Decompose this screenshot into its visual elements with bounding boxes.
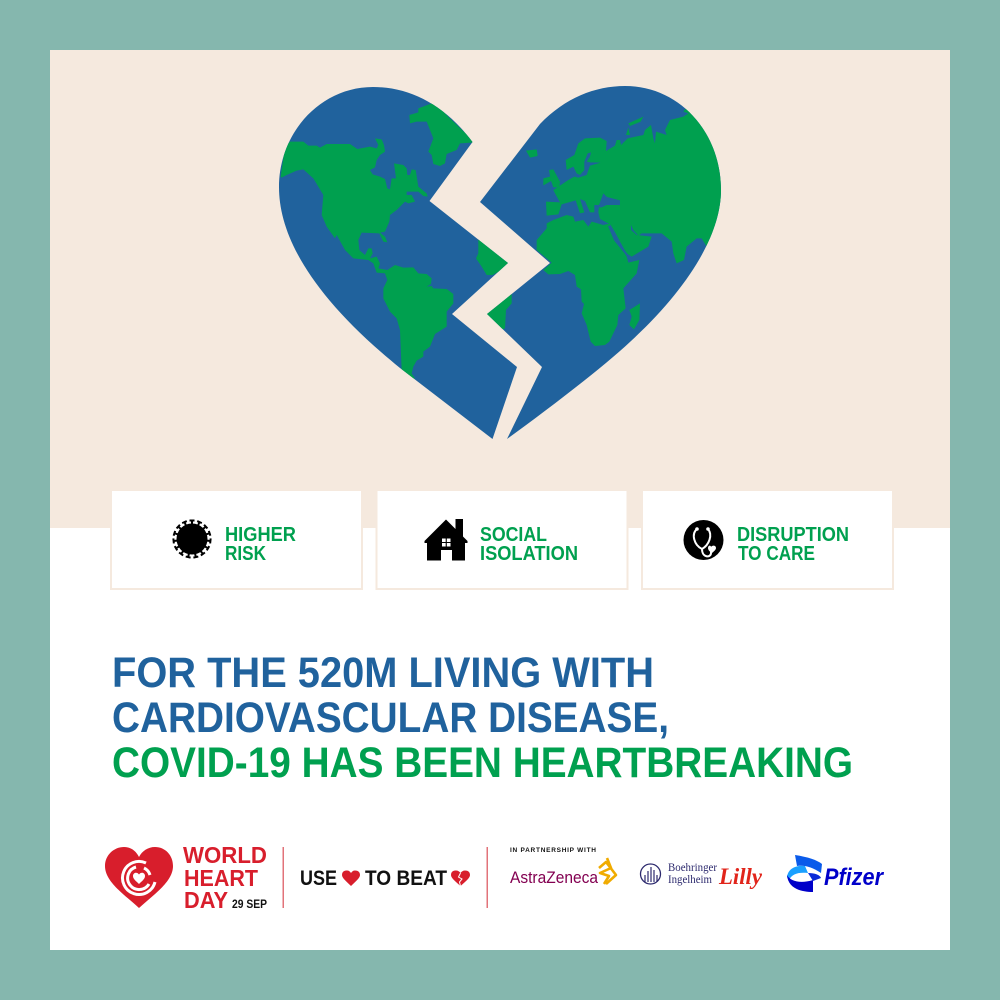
divider xyxy=(486,847,488,908)
icon: house xyxy=(424,519,468,560)
icon: AstraZeneca symbol xyxy=(599,858,616,884)
icon: stethoscope xyxy=(684,520,724,560)
icon: heart with rings xyxy=(105,847,173,908)
label: higher risk xyxy=(225,524,296,565)
icon: Boehringer Ingelheim xyxy=(640,864,660,884)
slogan: use heart to beat: TO BEAT xyxy=(365,867,447,890)
label: disruption to care xyxy=(737,524,849,565)
headline: COVID-19 HAS BEEN HEARTBREAKING xyxy=(112,739,853,787)
label: social isolation: ISOLATION xyxy=(480,543,578,565)
label: higher risk: RISK xyxy=(225,543,266,565)
AstraZeneca wordmark: AstraZeneca xyxy=(510,868,598,887)
Boehringer Ingelheim wordmark: Boehringer xyxy=(668,862,717,874)
slogan: use heart to beat xyxy=(300,867,470,890)
icon: heart xyxy=(342,870,360,886)
stat card: higher risk xyxy=(111,490,362,589)
label: higher risk: HIGHER xyxy=(225,524,296,546)
wordmark: DAY xyxy=(184,887,228,913)
date: 29 SEP xyxy=(232,899,267,911)
stat card: social isolation xyxy=(376,490,628,589)
stat card: disruption to care xyxy=(642,490,893,589)
icon: virus xyxy=(172,520,212,559)
label: disruption to care: TO CARE xyxy=(738,543,815,565)
headline xyxy=(112,649,853,787)
label: social isolation: SOCIAL xyxy=(480,524,547,546)
label: disruption to care: DISRUPTION xyxy=(737,524,849,546)
wordmark xyxy=(183,842,267,913)
partnership label: IN PARTNERSHIP WITH xyxy=(510,847,596,854)
right half of globe heart xyxy=(480,86,721,439)
World Heart Day logo xyxy=(105,842,267,913)
Boehringer Ingelheim wordmark: Ingelheim xyxy=(668,874,712,886)
slogan: use heart to beat: USE xyxy=(300,867,337,890)
headline: CARDIOVASCULAR DISEASE, xyxy=(112,694,669,742)
Lilly wordmark: Lilly xyxy=(718,864,763,889)
headline: FOR THE 520M LIVING WITH xyxy=(112,649,654,697)
beige upper panel xyxy=(50,50,950,528)
label: social isolation xyxy=(480,524,578,565)
divider xyxy=(282,847,284,908)
icon: broken heart xyxy=(451,870,470,886)
wordmark: HEART xyxy=(184,865,258,891)
partner logos xyxy=(510,847,884,892)
Pfizer wordmark: Pfizer xyxy=(824,864,884,891)
broken heart globe xyxy=(270,80,730,450)
wordmark: WORLD xyxy=(183,842,267,868)
Boehringer Ingelheim wordmark xyxy=(668,862,717,886)
icon: Pfizer symbol xyxy=(787,855,822,892)
left half of globe heart xyxy=(270,80,520,450)
